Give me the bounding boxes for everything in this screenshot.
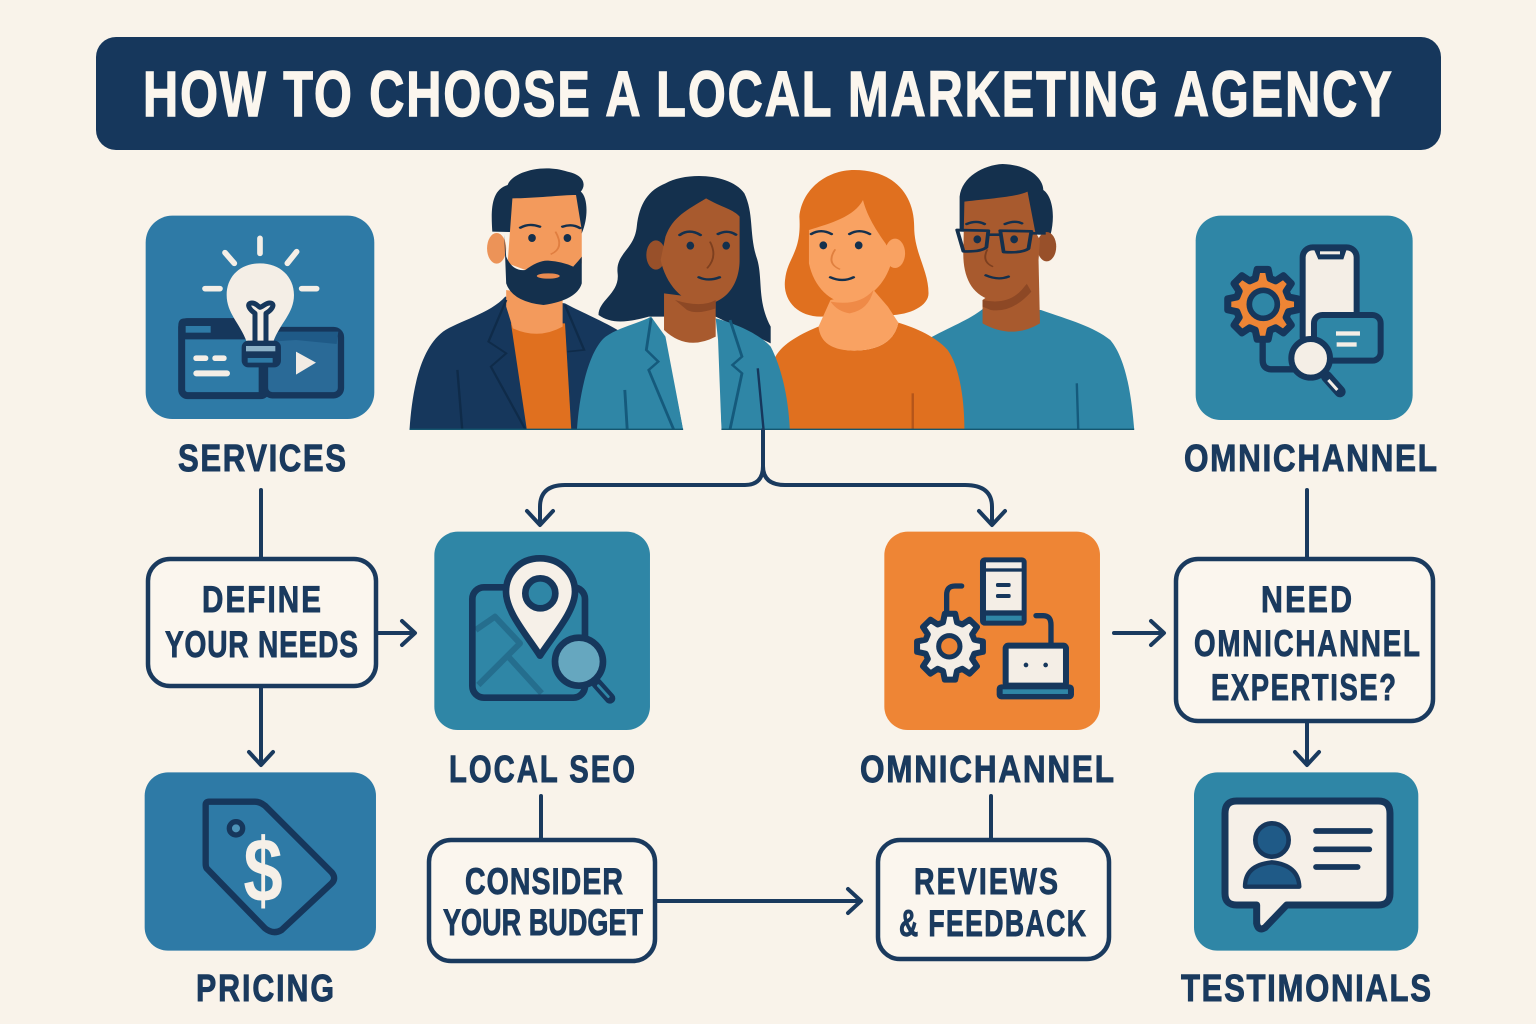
box: reviews and feedback: & FEEDBACK xyxy=(899,903,1086,944)
icon panel: omnichannel orange xyxy=(884,532,1100,730)
arrow: omnichannel to need expertise xyxy=(1114,621,1164,645)
icon panel: pricing: $ xyxy=(243,821,283,922)
icon panel: pricing xyxy=(145,772,376,951)
box: need omnichannel expertise: OMNICHANNEL xyxy=(1194,622,1420,664)
box: need omnichannel expertise xyxy=(1176,559,1433,721)
box: define your needs: DEFINE xyxy=(202,580,321,621)
people baseline xyxy=(410,427,1134,431)
title banner xyxy=(96,37,1441,150)
icon panel: local seo xyxy=(434,532,650,730)
label: omnichannel top right: OMNICHANNEL xyxy=(1184,437,1437,480)
label: testimonials: TESTIMONIALS xyxy=(1181,968,1431,1010)
arrow: need expertise to testimonials xyxy=(1295,722,1319,765)
box: need omnichannel expertise: NEED xyxy=(1261,579,1352,621)
connector: omnichannel to need expertise xyxy=(1305,490,1309,558)
box: consider your budget: CONSIDER xyxy=(465,860,623,902)
person: man with glasses in teal sweater xyxy=(926,164,1134,429)
connector: services to define your needs xyxy=(259,490,263,558)
box: consider your budget xyxy=(429,840,655,961)
connector: team to local seo and omnichannel xyxy=(527,430,1005,525)
box: consider your budget: YOUR BUDGET xyxy=(443,902,643,943)
arrow: define your needs to local seo xyxy=(377,621,415,645)
person: bearded man in navy jacket xyxy=(410,168,618,429)
icon panel: omnichannel top right xyxy=(1196,216,1413,420)
icon panel: services xyxy=(146,216,374,419)
title banner: HOW TO CHOOSE A LOCAL MARKETING AGENCY xyxy=(143,60,1392,131)
box: reviews and feedback: REVIEWS xyxy=(914,860,1058,902)
box: define your needs: YOUR NEEDS xyxy=(165,623,358,665)
label: omnichannel center: OMNICHANNEL xyxy=(860,748,1114,791)
label: services: SERVICES xyxy=(178,438,346,480)
arrow: define your needs to pricing xyxy=(249,687,273,765)
label: pricing: PRICING xyxy=(196,968,334,1010)
illustration: team of four people xyxy=(410,164,1134,429)
connector: omnichannel to reviews xyxy=(989,796,993,838)
arrow: budget to reviews xyxy=(656,889,861,913)
box: reviews and feedback xyxy=(878,840,1109,959)
connector: local seo to consider your budget xyxy=(539,796,543,838)
box: define your needs xyxy=(148,559,376,686)
icon panel: testimonials xyxy=(1194,772,1418,951)
label: local seo: LOCAL SEO xyxy=(449,748,635,791)
person: red-haired woman in orange top xyxy=(775,170,964,429)
person: woman in teal blazer xyxy=(577,176,790,429)
box: need omnichannel expertise: EXPERTISE? xyxy=(1211,667,1396,708)
